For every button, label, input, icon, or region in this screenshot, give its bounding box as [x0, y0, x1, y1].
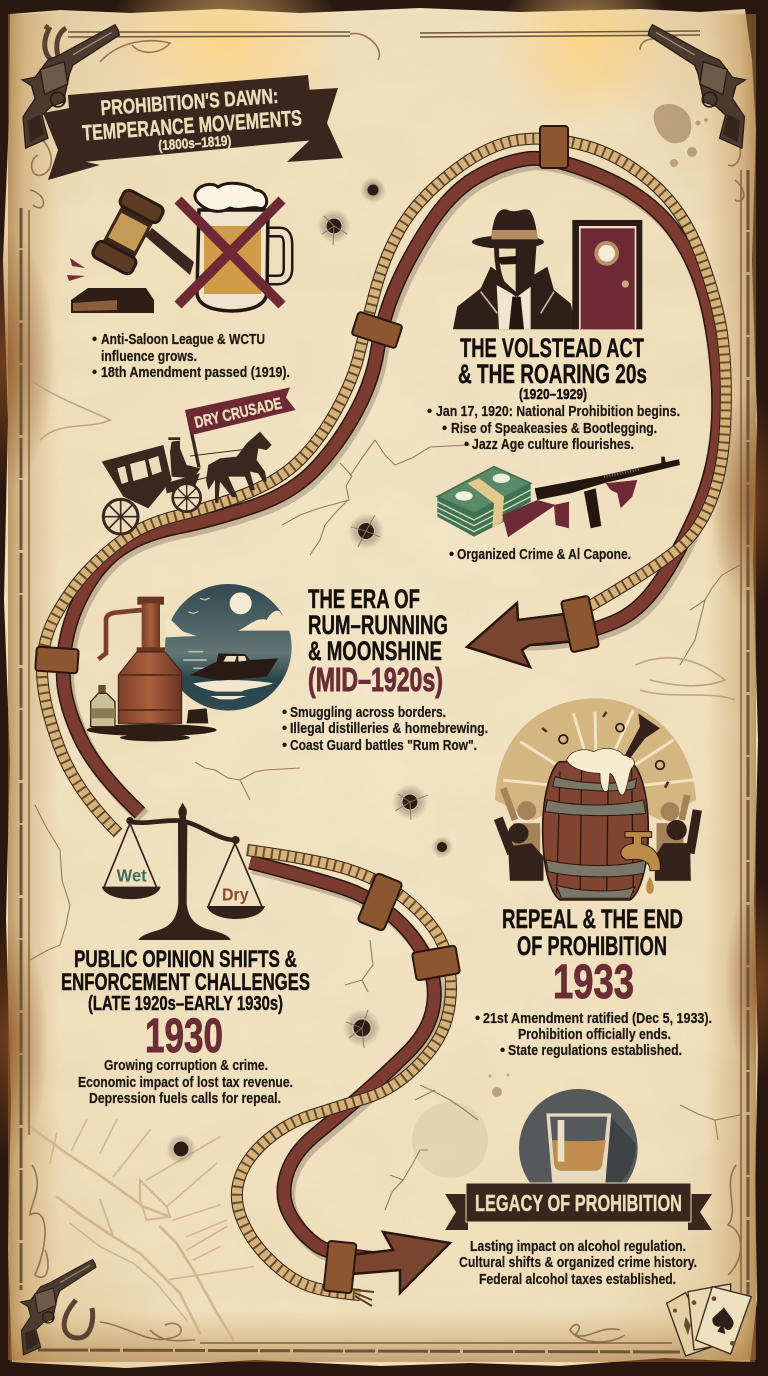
leather strap: lower	[323, 1241, 357, 1293]
heading banner: legacy of prohibition	[445, 1183, 712, 1230]
heading: public opinion: (LATE 1920s–EARLY 1930s)	[88, 993, 283, 1015]
heading: rum-running: & MOONSHINE	[308, 636, 442, 666]
cracks	[30, 380, 740, 1210]
panel: public opinion	[61, 803, 310, 1107]
icon: whiskey glass medallion	[519, 1089, 638, 1208]
text block: temperance bullets: •	[92, 332, 97, 348]
text block: rum-running bullets: •	[282, 738, 287, 754]
icon: gangster in fedora	[453, 209, 642, 329]
text block: temperance bullets: •	[92, 365, 97, 381]
heading: volstead act	[458, 333, 647, 403]
icon: balance scale wet and dry: Wet	[117, 866, 147, 886]
panel: repeal	[475, 698, 712, 1059]
leather strap: upper	[357, 873, 403, 931]
heading: repeal: 1933	[553, 956, 634, 1009]
text block: temperance bullets: Anti-Saloon League & WCTU	[101, 332, 265, 348]
text block: rum-running bullets: Illegal distilleries & homebrewing.	[290, 721, 488, 737]
text block: repeal bullets: •	[475, 1011, 480, 1027]
heading: volstead act: (1920–1929)	[519, 386, 587, 403]
text block: rum-running bullets	[282, 705, 488, 754]
text block: volstead bullets	[427, 404, 680, 453]
icon: celebrating crowd with barrel	[495, 698, 697, 900]
icon: top right revolver	[648, 25, 745, 148]
text block: repeal bullets: •	[500, 1043, 505, 1059]
heading: public opinion	[61, 946, 310, 1063]
text block: public opinion points: Economic impact of lost tax revenue.	[78, 1075, 293, 1091]
heading banner: (1800s–1819)	[158, 132, 232, 153]
text block: volstead bullets: Jazz Age culture flourishes.	[472, 437, 634, 453]
heading: public opinion: PUBLIC OPINION SHIFTS &	[74, 946, 297, 973]
text block: rum-running bullets: Coast Guard battles "Rum Row".	[290, 738, 477, 754]
text block: legacy points: Cultural shifts & organized crime history.	[459, 1255, 697, 1271]
heading: rum-running: (MID–1920s)	[308, 661, 443, 698]
icon: horse carriage with dry crusade flag: DRY CRUSADE	[193, 395, 284, 432]
text block: rum-running bullets: Smuggling across borders.	[290, 705, 446, 721]
panel: legacy	[445, 1089, 712, 1288]
panel: temperance movements	[43, 75, 343, 534]
heading banner: PROHIBITION'S DAWN:	[100, 85, 279, 120]
text block: temperance bullets: influence grows.	[101, 349, 197, 365]
text block: public opinion points	[78, 1058, 293, 1107]
text block: volstead bullets: •	[442, 421, 447, 437]
icon: balance scale wet and dry	[102, 803, 265, 940]
heading banner: legacy of prohibition: LEGACY OF PROHIBITION	[475, 1190, 682, 1216]
heading: volstead act: THE VOLSTEAD ACT	[460, 333, 644, 363]
heading banner	[43, 75, 343, 180]
panel: volstead act	[427, 209, 680, 563]
text block: rum-running bullets: •	[282, 721, 287, 737]
text block: organized crime: Organized Crime & Al Capone.	[457, 547, 631, 563]
text block: temperance bullets	[92, 332, 290, 381]
text block: public opinion points: Growing corruption & crime.	[104, 1058, 268, 1074]
leather strap: far left	[35, 647, 79, 673]
heading: repeal: OF PROHIBITION	[517, 931, 667, 961]
text block: legacy points: Federal alcohol taxes established.	[479, 1272, 676, 1288]
heading: rum-running	[308, 584, 448, 698]
heading: public opinion: ENFORCEMENT CHALLENGES	[61, 969, 310, 996]
heading: public opinion: 1930	[145, 1010, 223, 1063]
text block: volstead bullets: •	[427, 404, 432, 420]
text block: rum-running bullets: •	[282, 705, 287, 721]
leather strap: middle	[412, 945, 460, 981]
text block: volstead bullets: •	[464, 437, 469, 453]
text block: repeal bullets: 21st Amendment ratified (Dec 5, 1933).	[483, 1011, 712, 1027]
text block: public opinion points: Depression fuels calls for repeal.	[89, 1091, 281, 1107]
icon: gavel	[67, 188, 194, 313]
heading: repeal	[502, 904, 683, 1009]
icon: cash stack	[437, 467, 531, 537]
heading: volstead act: & THE ROARING 20s	[458, 359, 647, 389]
leather strap: left of wagon rise	[351, 311, 403, 349]
heading: rum-running: RUM–RUNNING	[308, 610, 448, 640]
text block: organized crime: •	[449, 547, 454, 563]
heading: repeal: REPEAL & THE END	[502, 904, 683, 934]
arrowhead pointing right	[350, 1232, 450, 1293]
timeline rope and belt: upper section	[35, 126, 726, 833]
heading banner: TEMPERANCE MOVEMENTS	[81, 105, 303, 146]
text block: repeal bullets: Prohibition officially ends.	[518, 1027, 671, 1043]
text block: volstead bullets: Jan 17, 1920: National Prohibition begins.	[436, 404, 680, 420]
icon: tommy gun	[502, 457, 680, 537]
icon: horse carriage with dry crusade flag	[102, 387, 296, 534]
text block: legacy points: Lasting impact on alcohol regulation.	[470, 1239, 686, 1255]
faint map sketch bottom left	[30, 1120, 253, 1340]
panel: rum-running and moonshine	[87, 584, 488, 754]
icon: balance scale wet and dry: Dry	[222, 885, 249, 905]
heading: rum-running: THE ERA OF	[308, 584, 420, 614]
leather strap: top	[540, 126, 568, 168]
text block: temperance bullets: 18th Amendment passed (1919).	[101, 365, 290, 381]
icon: crossed-out beer mug	[178, 183, 288, 311]
icon: playing cards	[667, 1284, 751, 1356]
leather strap: near arrow	[561, 596, 599, 652]
icon: moonlit boat medallion	[165, 584, 292, 711]
icon: copper still and bottle	[87, 597, 217, 741]
bullet holes	[166, 177, 453, 1164]
icon: top left revolver and horseshoe	[22, 25, 119, 148]
text block: repeal bullets: State regulations established.	[508, 1043, 682, 1059]
text block: repeal bullets	[475, 1011, 712, 1059]
timeline rope and belt: lower section	[237, 850, 460, 1306]
text block: volstead bullets: Rise of Speakeasies & Bootlegging.	[451, 421, 657, 437]
text block: legacy points	[459, 1239, 697, 1288]
icon: bottom left revolver and horseshoe	[21, 1259, 96, 1355]
arrowhead pointing left	[467, 603, 590, 667]
